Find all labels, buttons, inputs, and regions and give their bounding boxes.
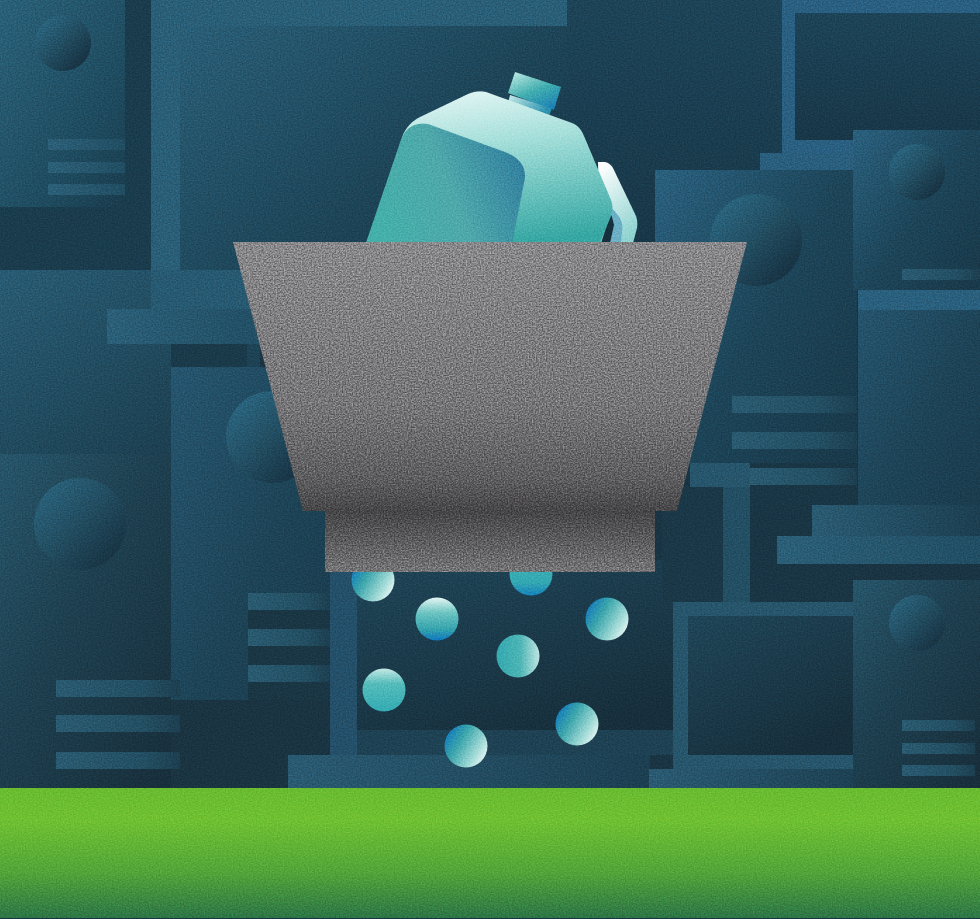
grass bbox=[0, 788, 980, 918]
circle: top left bbox=[35, 15, 91, 71]
panel: right with circle bbox=[853, 130, 980, 290]
bars: right centre bbox=[732, 396, 857, 485]
jug cap bbox=[508, 72, 561, 110]
panel: centre left bbox=[171, 367, 330, 700]
panel: lower right screen bbox=[673, 602, 853, 772]
jug handle bbox=[598, 162, 637, 243]
panel: bottom right bbox=[853, 580, 980, 788]
shelf: middle left bbox=[107, 309, 267, 344]
circle: lower left bbox=[34, 478, 126, 570]
bars: top left bbox=[48, 139, 125, 195]
bars: bottom right bbox=[902, 720, 975, 776]
circle: bottom right bbox=[889, 595, 945, 651]
jug body bbox=[366, 91, 612, 243]
droplets bbox=[352, 552, 628, 768]
panel: top centre large bbox=[151, 0, 567, 290]
funnel bbox=[233, 242, 747, 572]
panel: middle left bbox=[0, 270, 261, 455]
shelf: lower right bbox=[649, 769, 869, 788]
shelf: right stacked bbox=[777, 505, 980, 564]
icon: jug bbox=[366, 72, 637, 243]
funnel spout bbox=[325, 511, 655, 572]
panel: top left bbox=[0, 0, 151, 270]
bars: lower left bbox=[56, 680, 180, 769]
bars: centre left bbox=[248, 593, 330, 682]
panel: top centre dark bbox=[560, 0, 790, 250]
circle: right upper bbox=[889, 144, 945, 200]
panel: lower left bbox=[0, 454, 331, 788]
panel: right lower block bbox=[858, 290, 980, 505]
panel: right centre bbox=[655, 170, 858, 602]
circle: right centre bbox=[710, 194, 802, 286]
jug front panel bbox=[366, 124, 525, 243]
circle: centre left bbox=[226, 391, 318, 483]
shelf: centre bottom bbox=[288, 755, 650, 788]
bar: right upper bbox=[902, 269, 980, 280]
panel: centre under funnel bbox=[330, 463, 750, 755]
panel: top right bbox=[760, 0, 980, 170]
jug neck bbox=[508, 95, 552, 116]
